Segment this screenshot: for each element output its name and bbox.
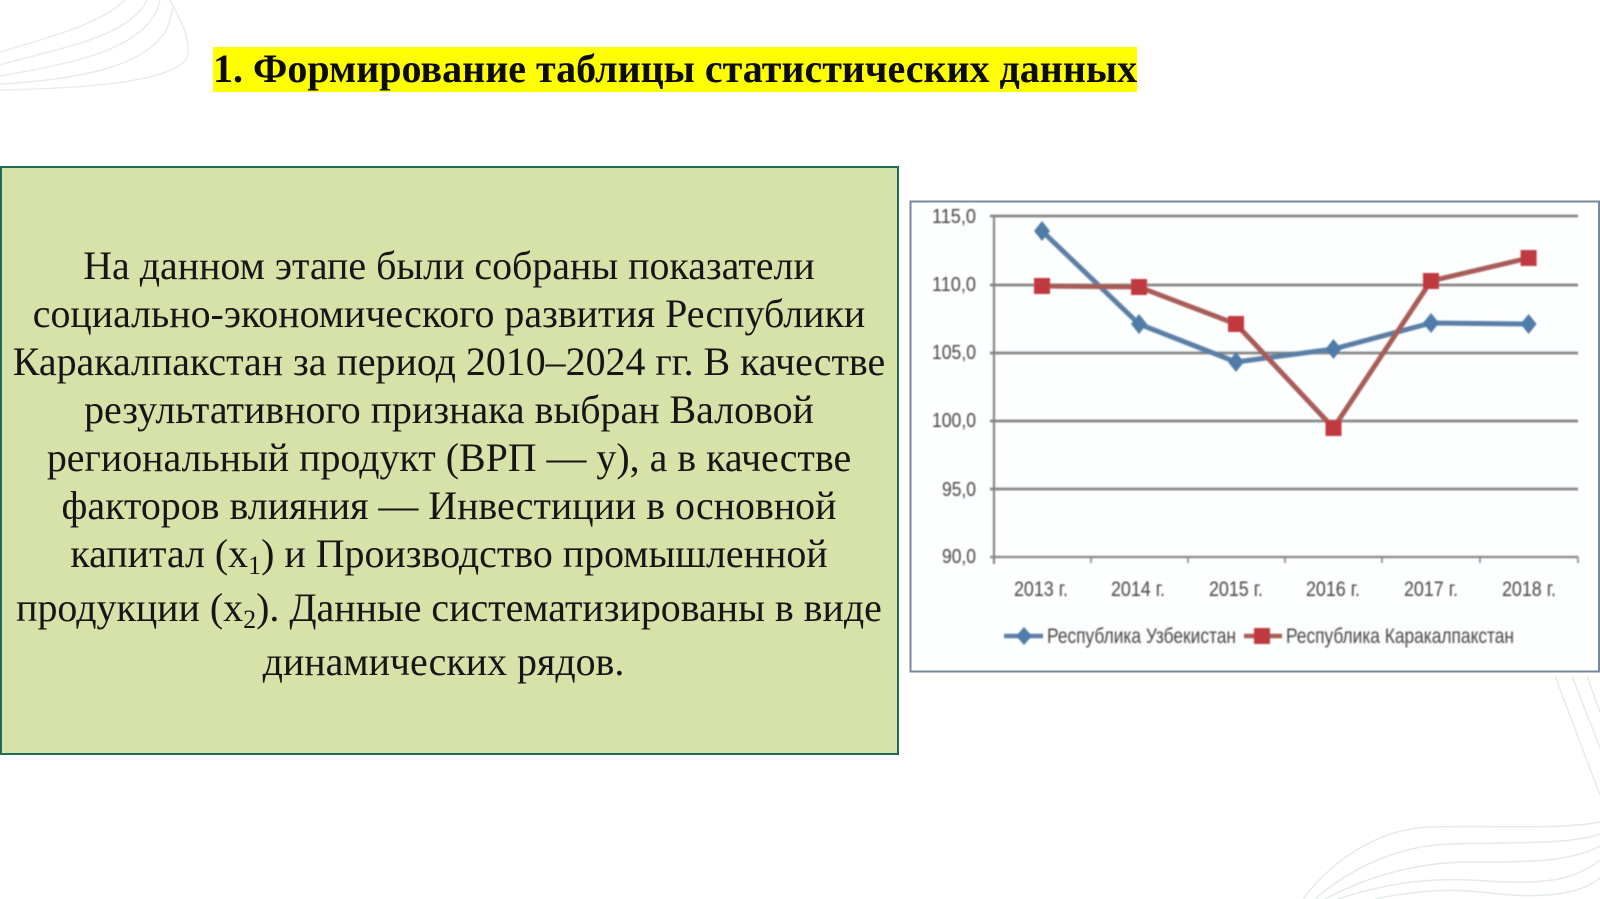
chart frame: [910, 202, 1599, 672]
y axis labels: [932, 206, 976, 568]
grid lines and axes: [990, 216, 1578, 564]
legend: Республика Каракалпакстан: [1286, 625, 1514, 648]
decorative swoosh top-left: [0, 0, 189, 91]
x axis labels: 2017 г.: [1404, 578, 1458, 601]
x axis labels: 2016 г.: [1306, 578, 1360, 601]
text line 6: факторов влияния — Инвестиции в основной: [62, 483, 836, 528]
panel: description text: [0, 166, 899, 755]
title: 1. Формирование таблицы статистических данных: [213, 46, 1137, 91]
text line 1: На данном этапе были собраны показатели: [83, 243, 815, 288]
x axis labels: [1014, 578, 1556, 601]
legend: [1004, 625, 1514, 648]
legend: Республика Узбекистан: [1047, 625, 1236, 648]
y axis labels: 95,0: [942, 479, 976, 501]
series: Республика Узбекистан: [1034, 221, 1537, 372]
x axis labels: 2015 г.: [1209, 578, 1263, 601]
x axis labels: 2014 г.: [1111, 578, 1165, 601]
text line 2: социально-экономического развития Республики: [33, 291, 865, 336]
y axis labels: 105,0: [932, 342, 976, 364]
text line 5: региональный продукт (ВРП — y), а в качестве: [47, 435, 851, 480]
y axis labels: 100,0: [932, 410, 976, 432]
text line 7: капитал (x1) и Производство промышленной: [70, 531, 828, 580]
decorative swoosh bottom-right: [1302, 676, 1600, 899]
y axis labels: 90,0: [942, 546, 976, 568]
y axis labels: 115,0: [932, 206, 976, 228]
text line 9: динамических рядов.: [263, 639, 624, 684]
text line 4: результативного признака выбран Валовой: [84, 387, 814, 432]
series: Республика Каракалпакстан: [1034, 250, 1537, 436]
x axis labels: 2018 г.: [1502, 578, 1556, 601]
x axis labels: 2013 г.: [1014, 578, 1068, 601]
y axis labels: 110,0: [932, 274, 976, 296]
line chart: [910, 200, 1600, 672]
text line 8: продукции (x2). Данные систематизированы в виде: [16, 585, 882, 634]
text line 3: Каракалпакстан за период 2010–2024 гг. В качестве: [13, 339, 885, 384]
